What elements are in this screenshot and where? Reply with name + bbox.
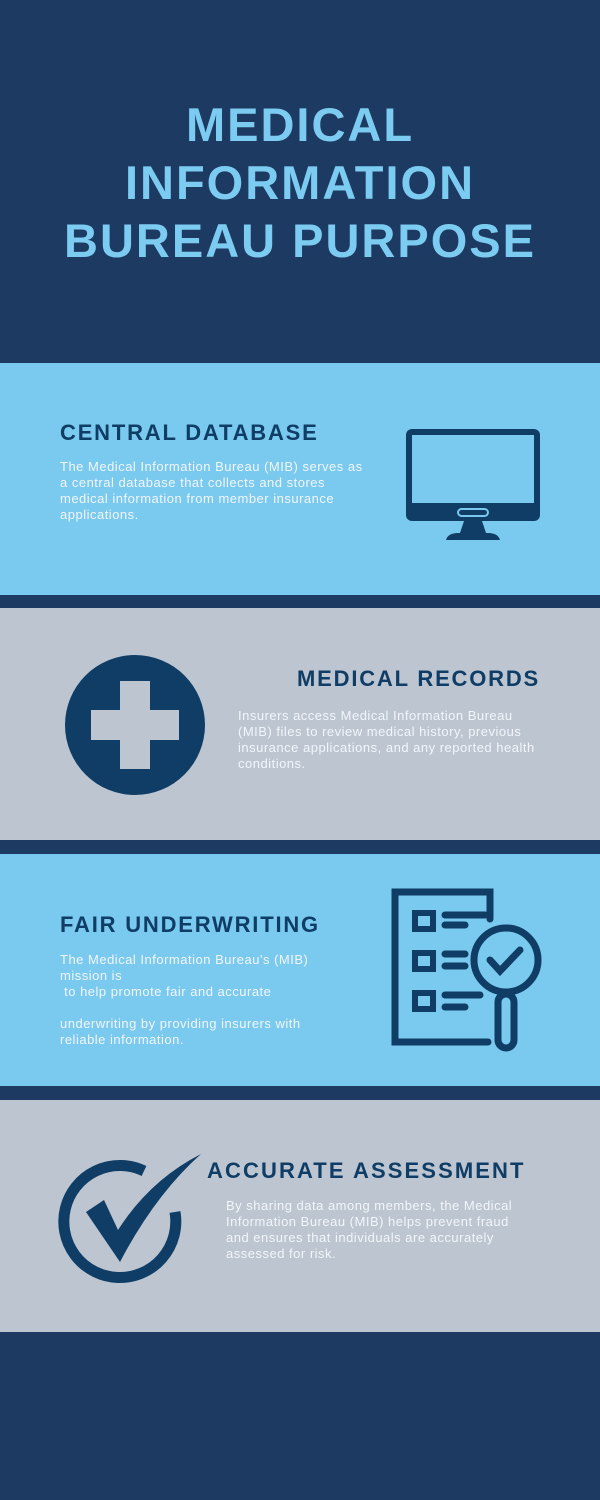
icon: checklist with magnifier	[392, 888, 542, 1052]
title: INFORMATION	[125, 156, 475, 209]
heading: medical records: MEDICAL RECORDS	[297, 666, 540, 691]
heading: central database: CENTRAL DATABASE	[60, 420, 319, 445]
panel: accurate assessment	[0, 1100, 600, 1332]
title	[64, 98, 536, 267]
panel: medical records	[0, 608, 600, 840]
icon: monitor	[406, 429, 540, 540]
title: BUREAU PURPOSE	[64, 214, 536, 267]
heading: accurate assessment: ACCURATE ASSESSMENT	[207, 1158, 526, 1183]
text: fair underwriting	[60, 952, 308, 1047]
text: central database: The Medical Information Bureau (MIB) serves as a central database that collects and stores medical information from member insurance applications.	[60, 459, 363, 522]
icon: medical cross	[65, 655, 205, 795]
panel: fair underwriting	[0, 854, 600, 1086]
panel: central database	[0, 363, 600, 595]
text: fair underwriting: to help promote fair and accurate	[64, 984, 271, 999]
text: accurate assessment: By sharing data among members, the Medical Information Bureau (MIB) helps prevent fraud and ensures that individuals are accurately assessed for risk.	[226, 1198, 512, 1261]
icon: check circle	[58, 1154, 201, 1283]
heading: fair underwriting: FAIR UNDERWRITING	[60, 912, 320, 937]
title: MEDICAL	[186, 98, 414, 151]
text: medical records: Insurers access Medical Information Bureau (MIB) files to review medical history, previous insurance applications, and any reported health conditions.	[238, 708, 535, 771]
text: fair underwriting: The Medical Information Bureau's (MIB) mission is	[60, 952, 308, 983]
text: fair underwriting: underwriting by providing insurers with reliable information.	[60, 1016, 301, 1047]
